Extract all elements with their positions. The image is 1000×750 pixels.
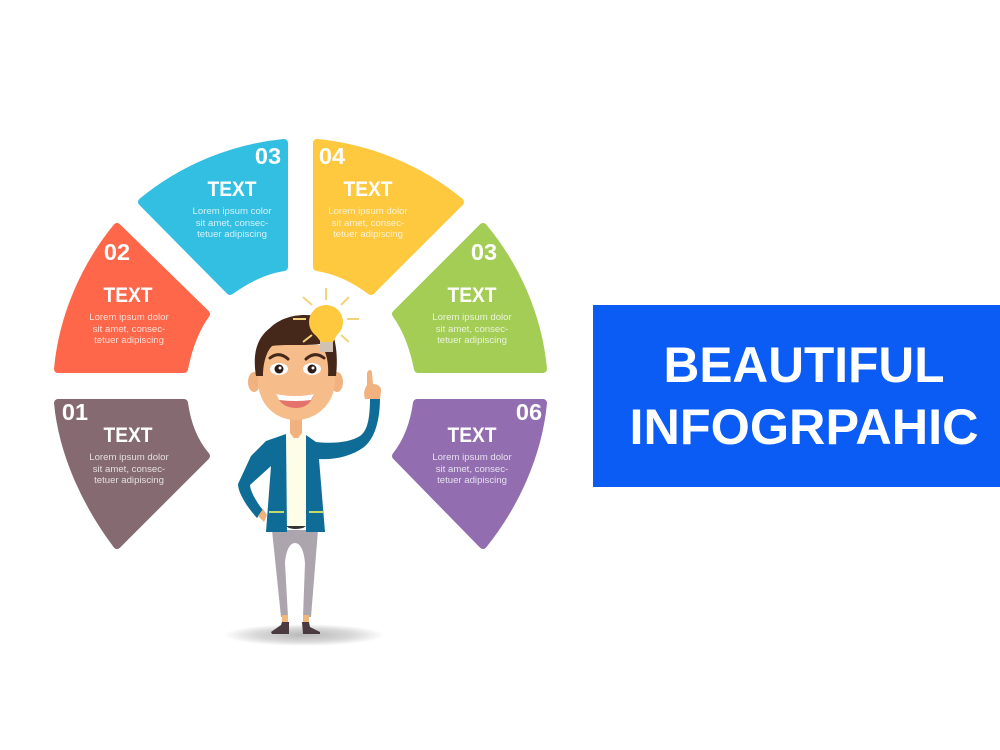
- face: [258, 345, 335, 420]
- panel: 03 blue segment: tetuer adipiscing: [197, 229, 267, 240]
- panel: 03 blue segment: sit amet, consec-: [196, 218, 268, 229]
- panel: 03 green segment: tetuer adipiscing: [437, 335, 507, 346]
- panel: 03 blue segment: TEXT: [208, 178, 257, 201]
- panel: 04 yellow segment: sit amet, consec-: [332, 218, 404, 229]
- shoes: [271, 615, 320, 634]
- illustration: man with idea: [224, 288, 384, 646]
- panel: 04 yellow segment: Lorem ipsum dolor: [328, 206, 409, 217]
- panel: 04 yellow segment: TEXT: [344, 178, 393, 201]
- panel: 06 purple segment: 06: [516, 399, 542, 425]
- eyebrows: [270, 355, 324, 359]
- eyes: [270, 363, 321, 375]
- panel: 02 red segment: [58, 227, 206, 369]
- panel: 02 red segment: Lorem ipsum dolor: [89, 312, 170, 323]
- panel: 06 purple segment: TEXT: [448, 424, 497, 447]
- panel: 01 brown segment: sit amet, consec-: [93, 464, 165, 475]
- icon: light bulb: [293, 288, 359, 352]
- pointing hand: [364, 370, 381, 399]
- panel: 06 purple segment: tetuer adipiscing: [437, 475, 507, 486]
- panel: 01 brown segment: TEXT: [104, 424, 153, 447]
- panel: 04 yellow segment: [317, 143, 460, 291]
- panel: 06 purple segment: [396, 399, 543, 545]
- ground shadow: [224, 624, 384, 646]
- mouth: [276, 394, 314, 408]
- panel: 03 green segment: [396, 227, 543, 369]
- panel: 01 brown segment: 01: [62, 399, 88, 425]
- legs: [272, 530, 318, 617]
- panel: 01 brown segment: tetuer adipiscing: [94, 475, 164, 486]
- panel: 03 blue segment: Lorem ipsum color: [193, 206, 272, 217]
- title banner: [593, 305, 1000, 487]
- panel: 03 blue segment: 03: [255, 143, 281, 169]
- panel: 02 red segment: 02: [104, 239, 130, 265]
- neck and shirt: [286, 418, 306, 529]
- panel: 02 red segment: sit amet, consec-: [93, 324, 165, 335]
- panel: 02 red segment: TEXT: [104, 284, 153, 307]
- hand on hip: [258, 509, 267, 522]
- panel: 06 purple segment: sit amet, consec-: [436, 464, 508, 475]
- panel: 04 yellow segment: 04: [319, 143, 345, 169]
- panel: 04 yellow segment: tetuer adipiscing: [333, 229, 403, 240]
- panel: 03 green segment: TEXT: [448, 284, 497, 307]
- title banner: INFOGRPAHIC: [630, 399, 978, 455]
- panel: 02 red segment: tetuer adipiscing: [94, 335, 164, 346]
- panel: 03 green segment: Lorem ipsum dolor: [432, 312, 513, 323]
- panel: 03 green segment: 03: [471, 239, 497, 265]
- hair: [255, 315, 337, 376]
- ears: [248, 372, 343, 392]
- panel: 03 blue segment: [142, 143, 284, 291]
- panel: 01 brown segment: [58, 399, 206, 545]
- panel: 03 green segment: sit amet, consec-: [436, 324, 508, 335]
- title banner: BEAUTIFUL: [664, 337, 944, 393]
- panel: 01 brown segment: Lorem ipsum dolor: [89, 452, 170, 463]
- jacket: [238, 398, 380, 532]
- panel: 06 purple segment: Lorem ipsum dolor: [432, 452, 513, 463]
